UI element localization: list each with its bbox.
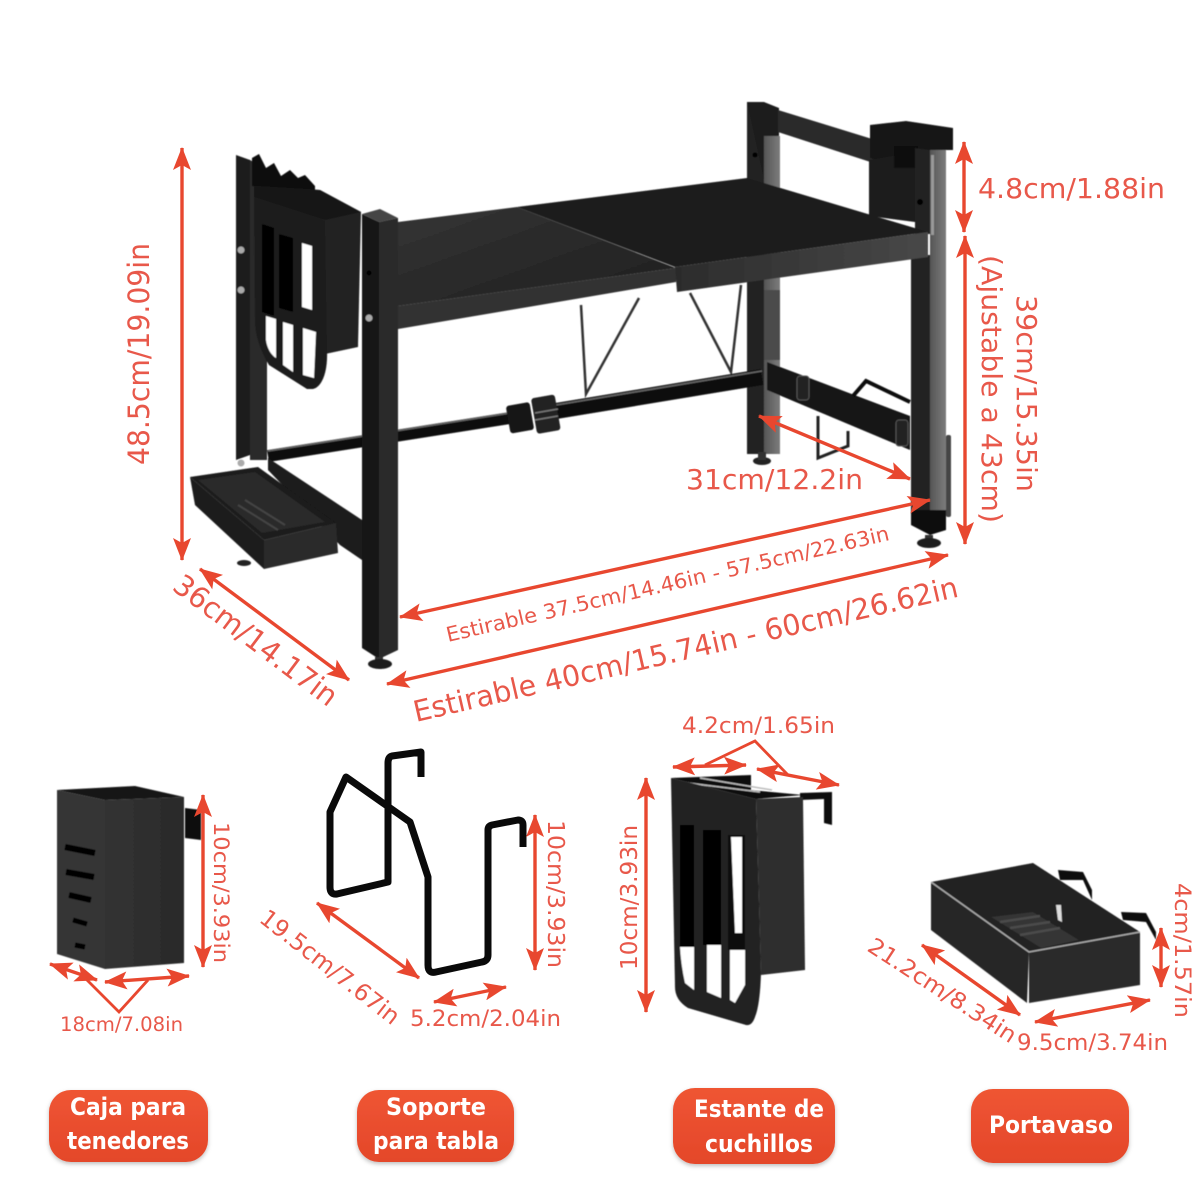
lower left bar [237,458,362,566]
drip tray on rack [190,467,338,569]
main dimension labels: 48.5cm/19.09in [122,243,156,465]
main dimension labels: Estirable 37.5cm/14.46in - 57.5cm/22.63in [444,521,891,647]
front left post [362,209,398,669]
support wires [581,285,741,394]
accessory: fork box [57,786,201,969]
button: Estante de cuchillos [673,1088,835,1164]
main dimension arrows [182,142,965,684]
main dimension labels: 36cm/14.17in [167,567,345,713]
button: Caja para tenedores: Caja para [70,1093,186,1121]
fork box dimensions: 18cm/7.08in [60,1013,183,1036]
fork box dimensions [50,795,233,1036]
main dimension labels [122,172,1165,729]
back right post [747,102,780,465]
fork box dimensions: 10cm/3.93in [209,822,233,963]
main dimension labels: 31cm/12.2in [686,463,863,496]
knife holder on rack [252,154,361,389]
main dimension labels: (Ajustable a 43cm) [975,255,1008,523]
knife holder dimensions: 4.2cm/1.65in [682,713,835,739]
accessory: board support hook [330,752,523,972]
knife holder dimensions: 10cm/3.93in [617,825,643,970]
knife holder dimensions [617,713,839,1012]
button: Estante de cuchillos: Estante de [694,1095,824,1123]
cup holder dimensions [863,883,1194,1056]
button: Portavaso [971,1089,1129,1163]
main dimension labels: 4.8cm/1.88in [978,172,1165,205]
cup holder dimensions: 4cm/1.57in [1169,883,1194,1018]
hook dimensions [254,815,568,1032]
shelf left half [398,207,676,329]
top rail with fork box [778,110,953,234]
main dimension labels: Estirable 40cm/15.74in - 60cm/26.62in [410,570,961,729]
cup holder dimensions: 9.5cm/3.74in [1017,1030,1168,1056]
button: Estante de cuchillos: cuchillos [705,1130,813,1158]
right front post [911,150,951,548]
accessory: knife holder [671,775,832,1025]
hook dimensions: 5.2cm/2.04in [410,1006,561,1032]
main dimension labels: 39cm/15.35in [1010,295,1043,492]
button: Soporte para tabla: Soporte [386,1093,486,1121]
accessory: cup holder tray [931,863,1156,1003]
button: Portavaso: Portavaso [989,1111,1113,1139]
button: Caja para tenedores [49,1090,208,1162]
main product: expandable rack [190,102,953,669]
cup holder dimensions: 21.2cm/8.34in [863,933,1021,1049]
left back post [236,155,267,466]
hook dimensions: 10cm/3.93in [542,820,568,968]
button: Caja para tenedores: tenedores [67,1127,189,1155]
button: Soporte para tabla [357,1090,514,1162]
telescopic rod [268,371,762,456]
shelf right half [517,178,928,292]
right side bar with board holder [767,362,910,458]
hook dimensions: 19.5cm/7.67in [254,904,406,1030]
button: Soporte para tabla: para tabla [373,1127,499,1155]
